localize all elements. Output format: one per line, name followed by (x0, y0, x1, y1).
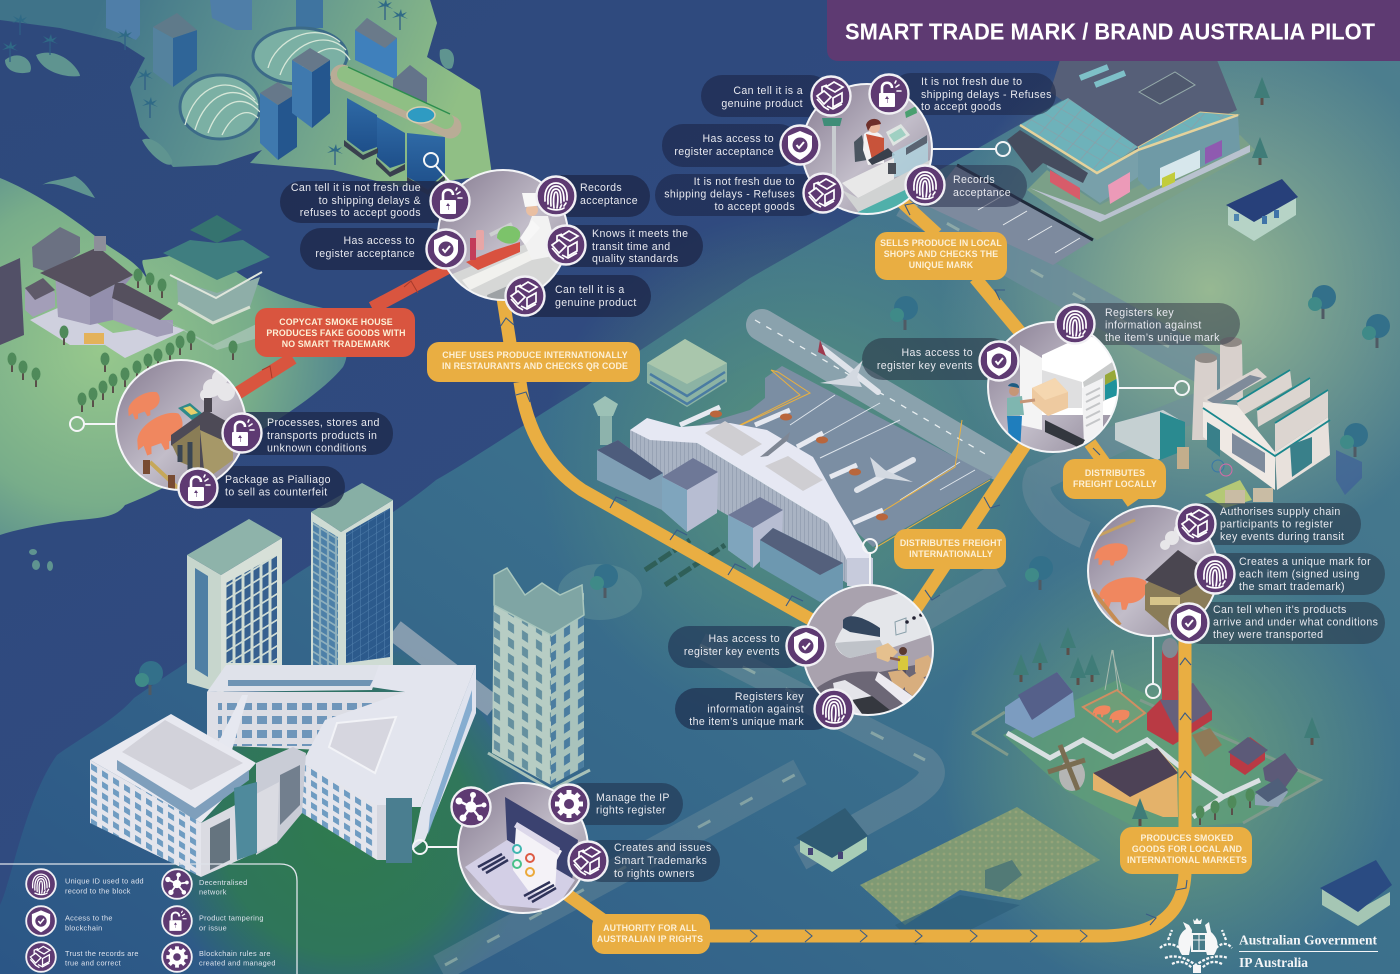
legend item: unique ID: record to the block (65, 886, 131, 896)
legend item: decentralised: Decentralised (199, 878, 248, 887)
label: produces smoked goods: INTERNATIONAL MARKETS (1127, 855, 1247, 865)
label: produces smoked goods: PRODUCES SMOKED (1140, 833, 1234, 843)
icon: fingerprint (536, 176, 576, 216)
left island buildings (0, 215, 285, 412)
scene: chef kitchen (439, 171, 566, 299)
logo text: Australian Government (1239, 932, 1378, 970)
scene: pigs and smokehouse (1088, 506, 1218, 640)
callout: arrive conditions: they were transported (1213, 629, 1323, 641)
station: chef (280, 170, 703, 317)
connector lines and rings (70, 142, 1189, 854)
scene: laptop issuing mark (458, 783, 588, 913)
callout: registers: Registers key (1105, 307, 1174, 319)
building: small house (796, 808, 868, 872)
label: sells produce (875, 232, 1007, 280)
legend item: tampering: Product tampering (199, 914, 264, 922)
title banner: SMART TRADE MARK / BRAND AUSTRALIA PILOT (845, 18, 1376, 44)
logo: Australian Government crest (1160, 918, 1232, 973)
icon: fingerprint (1196, 554, 1234, 594)
callout: not fresh left (655, 174, 823, 216)
legend item: trust: true and correct (65, 958, 121, 968)
label: authority: AUSTRALIAN IP RIGHTS (597, 934, 703, 944)
callout: register acceptance: Has access to (703, 133, 774, 145)
icon: network (452, 788, 490, 826)
building: bottom right house (1320, 860, 1392, 926)
building: right tower (488, 568, 590, 790)
callout: records acceptance (905, 165, 1027, 207)
station: copycat smoke house (116, 360, 393, 508)
legend item: access: blockchain (65, 924, 102, 932)
station: retail shop (655, 73, 1056, 222)
callout: creates mark: each item (signed using (1239, 568, 1360, 580)
legend item: unique ID: Unique ID used to add (65, 876, 144, 886)
bubble outline (802, 84, 932, 214)
icon: cube two (506, 276, 544, 316)
callout: register acceptance: register acceptance (674, 146, 774, 158)
callout: authorises (1180, 503, 1361, 545)
label: chef uses produce (427, 342, 640, 382)
callout: key events: register key events (684, 646, 780, 658)
legend item: decentralised: network (199, 888, 227, 896)
station: airport freight (668, 585, 945, 730)
bubble outline (803, 585, 933, 715)
logo text: Australian Government: IP Australia (1239, 955, 1308, 970)
callout: transit time (550, 225, 703, 267)
callout: creates: to rights owners (614, 868, 695, 880)
callout: registers: the item’s unique mark (689, 716, 804, 728)
label: authority (592, 914, 710, 954)
callout: creates (580, 840, 720, 882)
icon: shield (786, 626, 826, 666)
callout: not fresh (280, 181, 455, 223)
legend item: rules: created and managed (199, 958, 276, 968)
callout: not fresh: to shipping delays & (319, 195, 421, 207)
bubble outline (458, 783, 588, 913)
legend item: rules: Blockchain rules are (199, 949, 271, 958)
label: copycat smoke house: NO SMART TRADEMARK (282, 339, 391, 349)
callout: not fresh right (890, 73, 1056, 115)
icon: gear (550, 784, 588, 824)
station: freight distribution (862, 303, 1240, 452)
building: factory (1115, 337, 1362, 508)
callout: counterfeit: to sell as counterfeit (225, 486, 328, 498)
icon: cube (568, 842, 608, 880)
scene: truck loading (988, 322, 1120, 452)
icon: cube (1176, 504, 1216, 544)
callout: creates: Smart Trademarks (614, 855, 707, 867)
callout: registers: Registers key (735, 691, 804, 703)
bubble outline (438, 170, 568, 300)
label: chef uses produce: CHEF USES PRODUCE INTERNATIONALLY (442, 350, 628, 360)
building: airport (593, 320, 1000, 602)
icon: cube (812, 76, 850, 116)
roads (394, 200, 1235, 968)
callout: authorises: participants to register (1220, 518, 1333, 530)
callout: genuine: genuine product (555, 297, 637, 309)
callout: processes (225, 412, 393, 455)
callout: register acceptance (300, 228, 450, 270)
label: sells produce: SELLS PRODUCE IN LOCAL (880, 238, 1002, 248)
legend item: unique ID (26, 869, 144, 899)
city island buildings (2, 0, 450, 195)
label: distributes internationally: INTERNATIONALLY (909, 549, 993, 559)
icon: shield (426, 230, 466, 268)
callout: key events: Has access to (709, 633, 780, 645)
label: produces smoked goods: GOODS FOR LOCAL AND (1132, 844, 1242, 854)
scene: cargo plane (806, 586, 932, 714)
callout: arrive conditions: arrive and under what conditions (1213, 616, 1378, 628)
icon: fingerprint (814, 690, 854, 728)
callout: genuine: Can tell it is a (555, 284, 625, 296)
callout: records acceptance: Records (580, 182, 622, 194)
callout: key events: register key events (877, 360, 973, 372)
callout: not fresh: refuses to accept goods (300, 207, 421, 219)
callout: records acceptance (540, 175, 650, 217)
legend panel (0, 864, 297, 974)
trees: right side (885, 77, 1390, 675)
callout: key events (862, 338, 1012, 380)
icon: fingerprint (906, 166, 944, 204)
callout: transit time: quality standards (592, 253, 679, 265)
label: sells produce: SHOPS AND CHECKS THE (884, 249, 998, 259)
callout: registers: the item’s unique mark (1105, 332, 1220, 344)
callout: genuine product: Can tell it is a (733, 85, 803, 97)
callout: processes: Processes, stores and (267, 417, 380, 429)
label: distributes locally: DISTRIBUTES (1085, 468, 1145, 478)
legend item: access: Access to the (65, 914, 113, 922)
callout: processes: unknown conditions (267, 442, 367, 454)
callout: creates: Creates and issues (614, 842, 712, 854)
label: sells produce: UNIQUE MARK (909, 260, 974, 270)
callout: creates mark (1200, 553, 1385, 595)
callout: creates mark: the smart trademark) (1239, 581, 1345, 593)
title banner (827, 0, 1400, 61)
callout: register acceptance (662, 124, 800, 167)
label: produces smoked goods (1120, 827, 1252, 874)
callout: not fresh left: It is not fresh due to (694, 176, 795, 188)
land: left farm island (0, 178, 347, 535)
label: distributes locally: FREIGHT LOCALLY (1073, 479, 1157, 489)
building: headquarters blocks (90, 665, 476, 877)
callout: registers (675, 688, 835, 730)
callout: not fresh right: to accept goods (921, 101, 1002, 113)
callout: genuine product (701, 75, 831, 117)
icon: lock two (178, 468, 218, 508)
building: mall (925, 60, 1255, 265)
callout: not fresh right: It is not fresh due to (921, 76, 1022, 88)
land: top-left city island (0, 0, 492, 571)
legend item: access (26, 906, 113, 936)
roundabout plate (558, 564, 642, 620)
station: IP authority (452, 783, 720, 913)
icon: lock (430, 182, 470, 220)
callout: records acceptance: acceptance (953, 187, 1011, 199)
callout: transit time: Knows it meets the (592, 228, 688, 240)
icon: shield (1170, 604, 1208, 642)
bubble outline (116, 360, 246, 490)
label: distributes internationally: DISTRIBUTES FREIGHT (900, 538, 1003, 548)
label: copycat smoke house: COPYCAT SMOKE HOUSE (279, 317, 393, 327)
icon: cube (546, 226, 586, 264)
callout: registers: information against (707, 704, 804, 716)
callout: arrive conditions (1180, 602, 1385, 644)
legend item: trust: Trust the records are (65, 949, 139, 958)
callout: not fresh: Can tell it is not fresh due (291, 182, 421, 194)
label: copycat smoke house (255, 308, 415, 357)
legend item: trust (26, 942, 139, 972)
callout: not fresh left: to accept goods (714, 201, 795, 213)
callout: creates mark: Creates a unique mark for (1239, 556, 1371, 568)
callout: key events: Has access to (902, 347, 973, 359)
callout: arrive conditions: Can tell when it’s products (1213, 604, 1347, 616)
icon: shield (980, 342, 1018, 380)
label: distributes internationally (894, 529, 1006, 569)
label: copycat smoke house: PRODUCES FAKE GOODS WITH (266, 328, 406, 338)
arrows: supply chain route (238, 200, 1191, 942)
callout: manage: rights register (596, 804, 666, 816)
legend item: rules (162, 942, 276, 972)
label: chef uses produce: IN RESTAURANTS AND CHECKS QR CODE (442, 361, 628, 371)
icon: lock (870, 74, 908, 114)
icon: lock (222, 414, 262, 452)
callout: records acceptance: Records (953, 174, 995, 186)
callout: not fresh left: shipping delays - Refuses (664, 188, 795, 200)
callout: register acceptance: register acceptance (315, 248, 415, 260)
station: producer farm (1088, 503, 1385, 644)
label: authority: AUTHORITY FOR ALL (603, 923, 697, 933)
callout: authorises: Authorises supply chain (1220, 506, 1341, 518)
legend item: decentralised (162, 869, 248, 899)
callout: transit time: transit time and (592, 241, 671, 253)
building: headquarters towers (187, 483, 393, 693)
building: house top right (1226, 179, 1298, 241)
callout: registers (1060, 303, 1240, 345)
callout: counterfeit (180, 466, 345, 508)
callout: register acceptance: Has access to (344, 235, 415, 247)
icon: fingerprint (1056, 304, 1094, 344)
callout: authorises: key events during transit (1220, 531, 1344, 543)
scene: shop cashier (805, 85, 931, 213)
callout: processes: transports products in (267, 430, 377, 442)
callout: manage: Manage the IP (596, 792, 670, 804)
callout: genuine (510, 275, 651, 317)
icon: cube two (804, 174, 842, 212)
icon: shield (780, 126, 820, 164)
callout: not fresh right: shipping delays - Refuses (921, 89, 1052, 101)
legend item: tampering: or issue (199, 924, 227, 932)
trees: bottom left (135, 564, 618, 695)
callout: counterfeit: Package as Pialliago (225, 474, 331, 486)
label: distributes locally (1063, 459, 1166, 499)
logo text: Australian Government: Australian Government (1239, 932, 1378, 948)
scene: pigs and shed (116, 360, 246, 490)
callout: key events (668, 626, 808, 668)
bubble outline (988, 322, 1118, 452)
callout: registers: information against (1105, 320, 1202, 332)
farm scene (860, 627, 1320, 945)
bubble outline (1088, 506, 1218, 636)
callout: records acceptance: acceptance (580, 195, 638, 207)
callout: manage (560, 783, 683, 825)
legend item: tampering (162, 906, 264, 936)
callout: genuine product: genuine product (721, 98, 803, 110)
